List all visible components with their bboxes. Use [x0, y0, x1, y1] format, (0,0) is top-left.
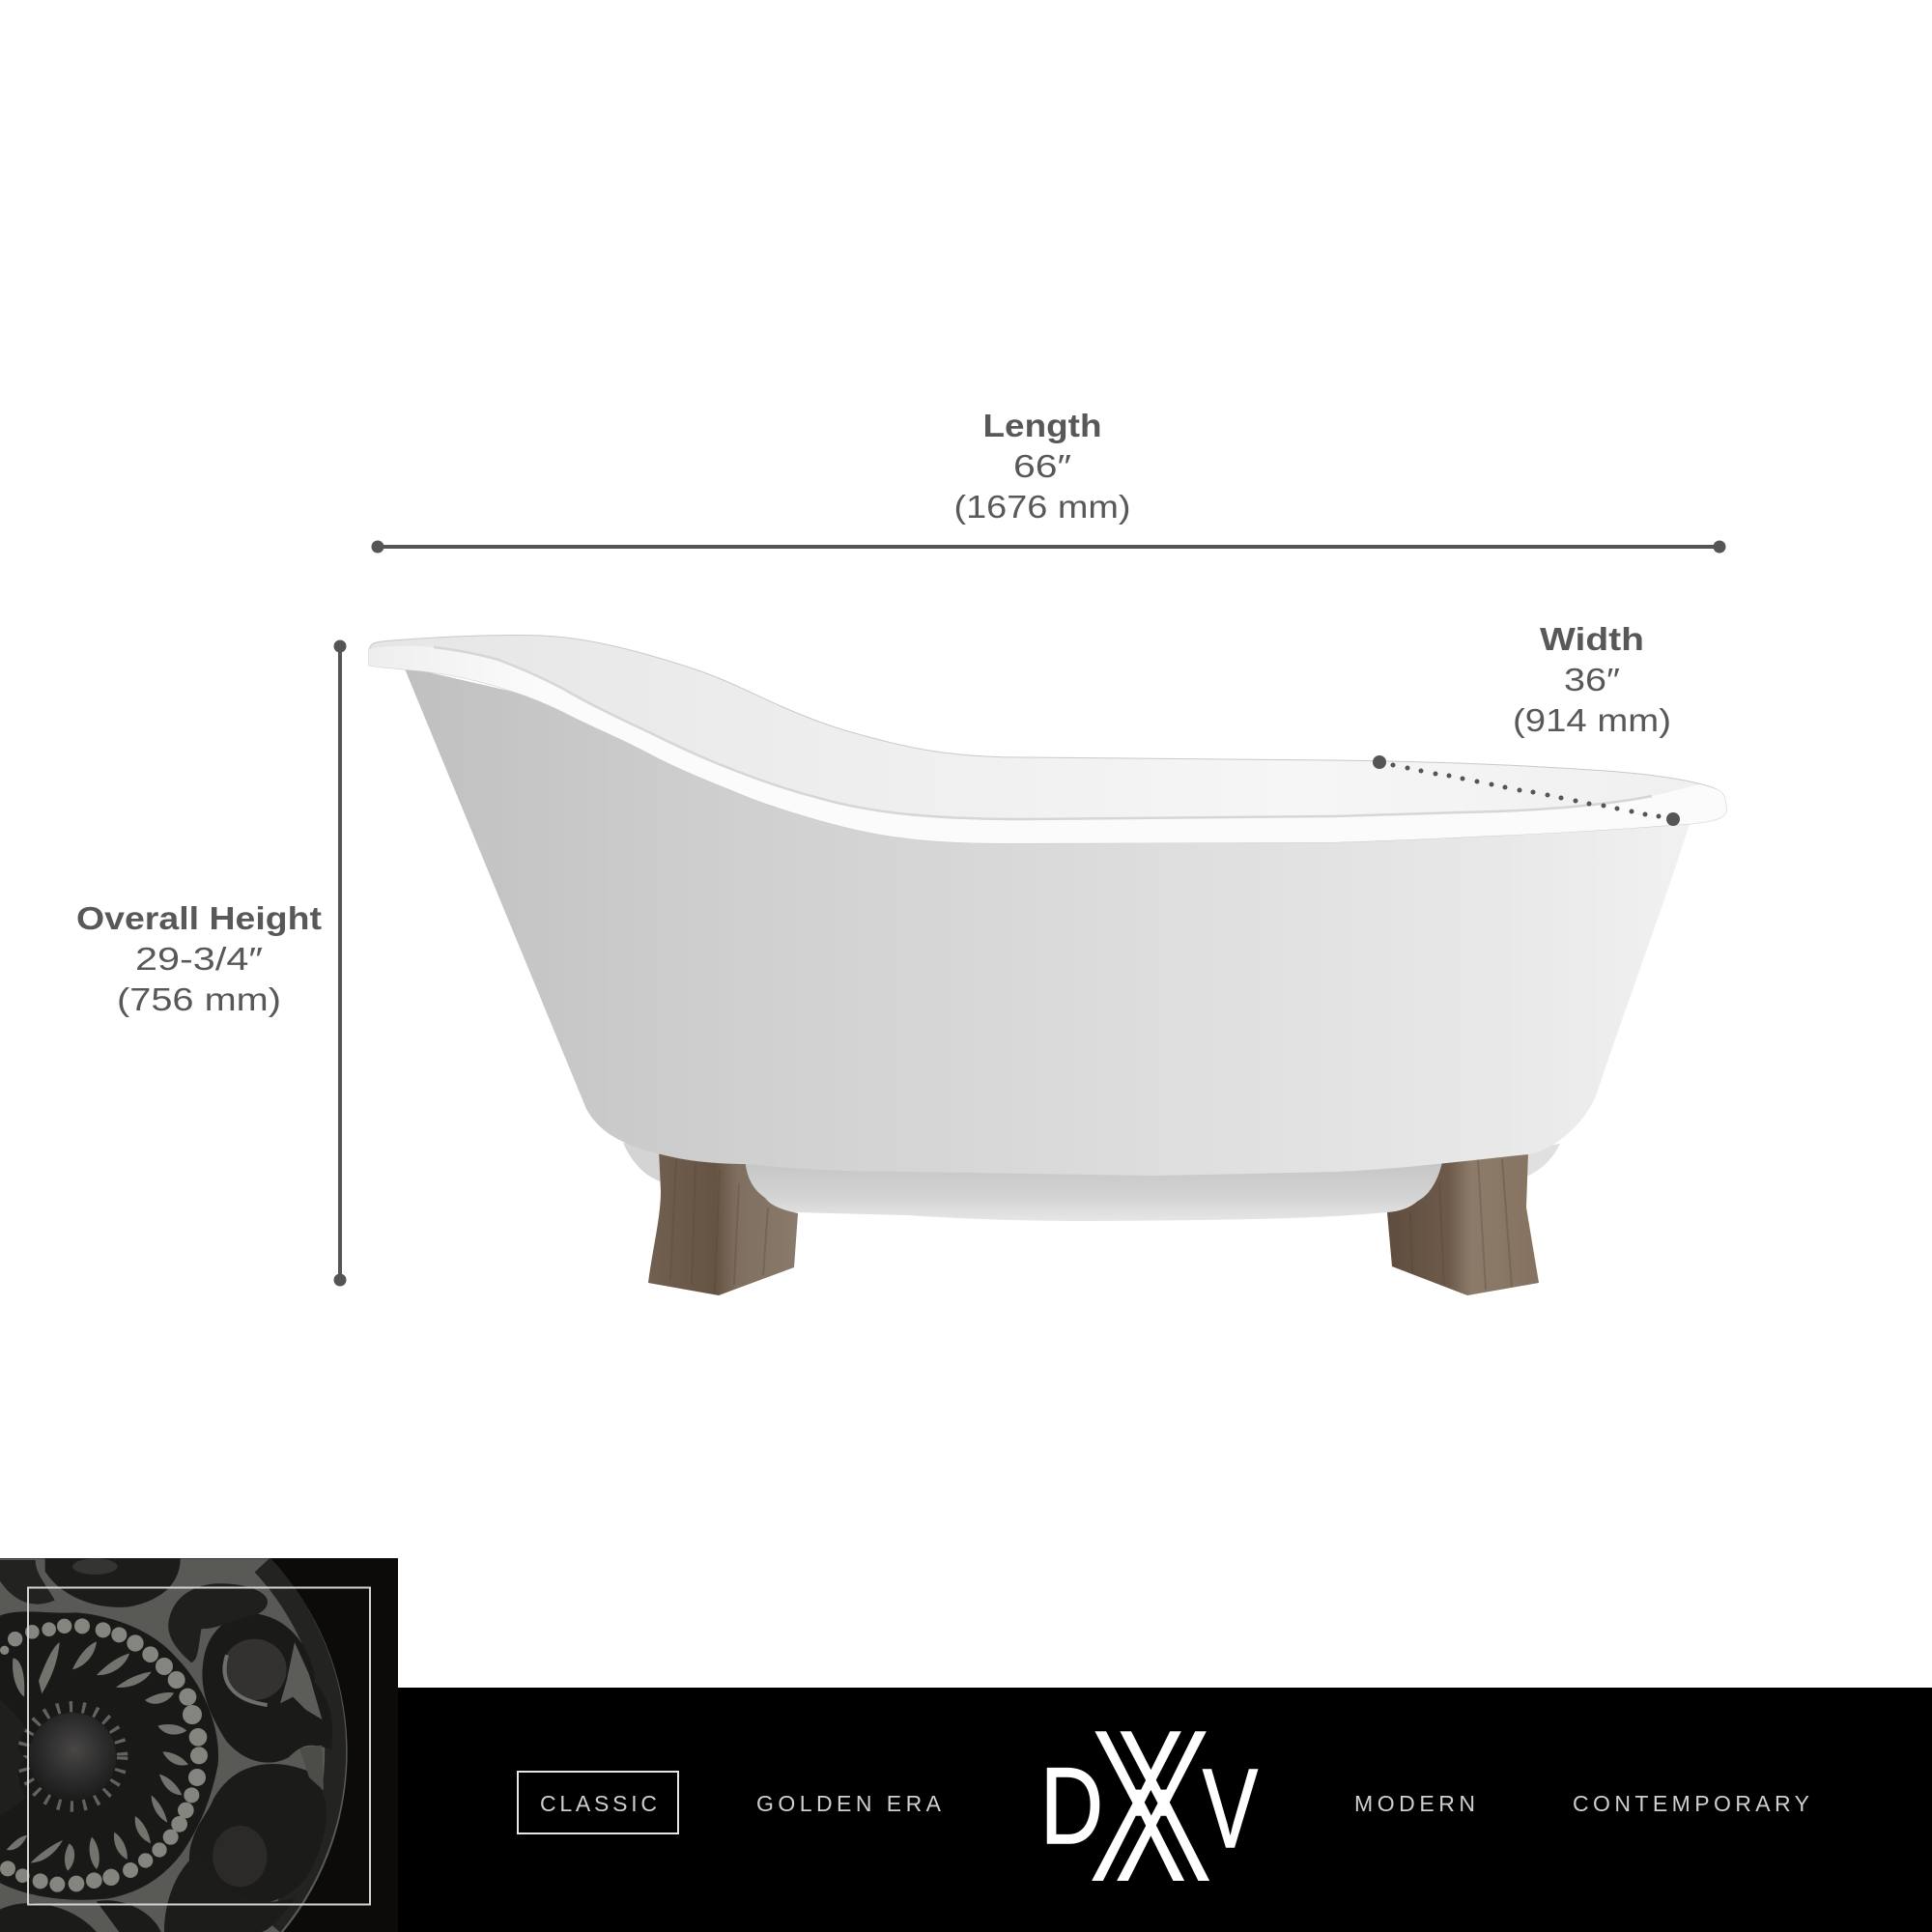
logo double X: X: [1086, 1684, 1190, 1927]
thin white frame: [28, 1588, 370, 1905]
label: length: Length: [983, 409, 1101, 444]
label: classic: CLASSIC: [540, 1791, 657, 1816]
inner petals: [7, 1641, 188, 1871]
label: overall height: 29-3/4″: [135, 942, 263, 978]
left petals: [17, 1728, 25, 1770]
lower right scroll: [192, 1746, 324, 1902]
bottom scrolls: [164, 1861, 277, 1932]
bathtub illustration: [369, 635, 1726, 1295]
label: width: 36″: [1564, 663, 1620, 698]
dimension: overall height line: [334, 639, 346, 1287]
bead ring: [0, 1618, 208, 1892]
style label: modern: MODERN: [1354, 1791, 1475, 1816]
infographic canvas: [0, 413, 1932, 1932]
label: overall height: (756 mm): [117, 982, 281, 1018]
left wooden leg: [648, 1150, 798, 1295]
upper leaf: [170, 1586, 266, 1660]
sun ray ticks: [22, 1707, 123, 1806]
footer black band: [398, 1688, 1932, 1932]
logo letter D: D: [1040, 1746, 1103, 1866]
label: overall height: [76, 901, 322, 1018]
medallion disc: [0, 1558, 348, 1932]
right wooden leg: [1387, 1152, 1539, 1295]
active style box: classic: [518, 1772, 678, 1833]
logo letter V: V: [1203, 1746, 1258, 1871]
medallion outer ring: [263, 1565, 335, 1925]
tub underside right sliver: [1521, 1144, 1560, 1177]
style label: contemporary: CONTEMPORARY: [1573, 1791, 1809, 1816]
paisley bead field: [0, 1614, 216, 1897]
dimension: width dotted line: [1373, 755, 1680, 826]
label: width: Width: [1540, 622, 1644, 658]
label: length: 66″: [1013, 449, 1071, 485]
tub outer body: [404, 667, 1690, 1176]
rim inner shadow line: [434, 647, 1652, 819]
tub interior and back rim: [369, 635, 1726, 843]
tub underside left sliver: [623, 1143, 667, 1182]
upper right scroll: [206, 1617, 329, 1759]
bottom left scrolls: [0, 1900, 161, 1932]
top scroll boss: [72, 1558, 118, 1575]
dimension: length line: [371, 541, 1725, 553]
label: width: [1513, 622, 1671, 739]
tub bowl centre: [729, 1159, 1459, 1221]
DXV logo: [1040, 1684, 1258, 1927]
logo double X: X: [1111, 1684, 1215, 1927]
label: overall height: Overall Height: [76, 901, 322, 937]
label: length: [954, 409, 1130, 526]
label: length: (1676 mm): [954, 490, 1130, 526]
top scrolls: [45, 1558, 181, 1607]
label: width: (914 mm): [1513, 703, 1671, 739]
white front rim band: [369, 646, 1726, 843]
central boss: [29, 1713, 116, 1801]
top left scroll: [0, 1560, 55, 1605]
panel: ornamental medallion swatch: [0, 1558, 398, 1932]
style label: golden era: GOLDEN ERA: [756, 1791, 942, 1816]
